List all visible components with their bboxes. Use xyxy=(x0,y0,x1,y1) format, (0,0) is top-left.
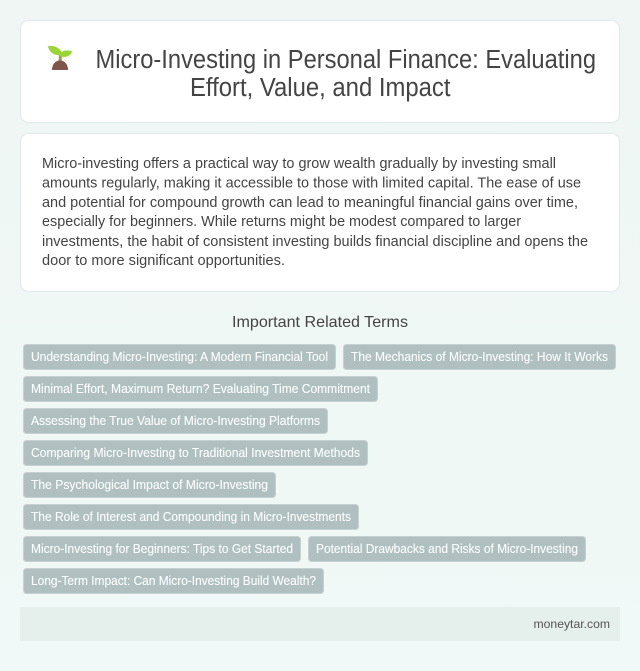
tag xyxy=(24,568,324,594)
tag xyxy=(24,408,328,434)
text block: summary: investments, the habit of consistent investing builds financial discipline and opens the xyxy=(42,234,588,250)
panel: related term tags xyxy=(24,344,616,594)
tag: Long-Term Impact: Can Micro-Investing Build Wealth? xyxy=(31,574,316,588)
tag: The Psychological Impact of Micro-Investing xyxy=(31,478,268,492)
panel: title card xyxy=(20,20,620,122)
text block: summary: door to more significant opportunities. xyxy=(42,253,285,269)
tag: Assessing the True Value of Micro-Investing Platforms xyxy=(31,414,320,428)
panel: summary paragraph xyxy=(20,134,620,292)
title: Micro-Investing in Personal Finance: Evaluating xyxy=(96,46,596,74)
tag: The Mechanics of Micro-Investing: How It Works xyxy=(351,350,608,364)
text block: summary: and potential for compound growth can lead to meaningful financial gains over time, xyxy=(42,195,578,211)
tag xyxy=(24,536,300,562)
tag xyxy=(24,440,368,466)
tag xyxy=(24,344,336,370)
tag: The Role of Interest and Compounding in Micro-Investments xyxy=(31,510,351,524)
tag xyxy=(308,536,586,562)
footer xyxy=(20,607,620,641)
text block: summary: Micro-investing offers a practical way to grow wealth gradually by investing small xyxy=(42,156,556,172)
text block: summary: amounts regularly, making it accessible to those with limited capital. The ease of use xyxy=(42,176,581,192)
tag xyxy=(24,472,276,498)
icon: sprout xyxy=(48,46,72,70)
tag: Understanding Micro-Investing: A Modern Financial Tool xyxy=(31,350,328,364)
footer: moneytar.com xyxy=(534,617,610,631)
tag: Minimal Effort, Maximum Return? Evaluating Time Commitment xyxy=(31,382,370,396)
tag xyxy=(344,344,616,370)
tag: Potential Drawbacks and Risks of Micro-Investing xyxy=(316,542,578,556)
tag xyxy=(24,504,358,530)
text block: summary xyxy=(42,156,588,269)
tag: Micro-Investing for Beginners: Tips to Get Started xyxy=(31,542,293,556)
tag xyxy=(24,376,378,402)
title: Effort, Value, and Impact xyxy=(190,74,450,102)
heading: related terms: Important Related Terms xyxy=(232,314,408,331)
tag: Comparing Micro-Investing to Traditional Investment Methods xyxy=(31,446,360,460)
text block: summary: especially for beginners. While returns might be modest compared to larger xyxy=(42,214,521,230)
title xyxy=(96,46,596,102)
